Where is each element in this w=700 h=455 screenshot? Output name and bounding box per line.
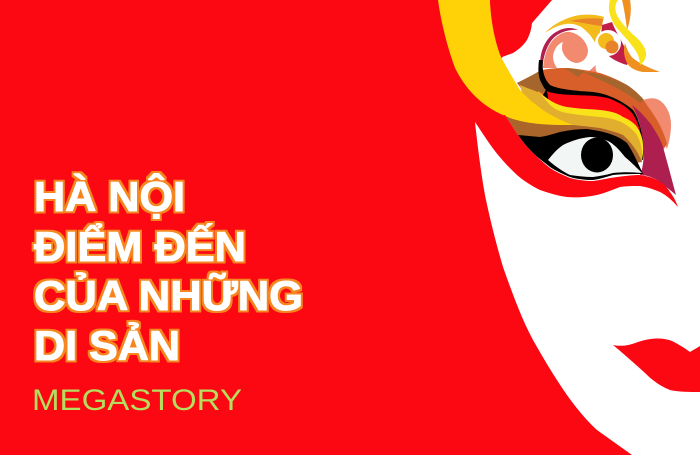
gold eyelid band [520,85,642,162]
red brow stroke [547,91,642,160]
dark brown brow edges [517,68,644,103]
brown lower lid [505,115,642,165]
black brow stroke [538,60,643,160]
salmon peak [585,65,598,74]
eye [518,129,643,180]
yellow eyelid stripe [538,91,643,160]
orange tail feather [622,0,660,72]
orange feather layer [570,18,603,26]
purple eye wing [632,105,676,195]
lips [613,338,700,392]
orange brown brow [517,68,667,150]
title line 2: ĐIỂM ĐẾN [34,222,246,270]
salmon circle behind eye [641,98,671,149]
white swirl circle [595,30,621,56]
black eye outline [518,129,643,180]
title line 1: HÀ NỘI [34,172,185,220]
gold feather [545,15,604,48]
salmon swirl [543,32,588,68]
crimson swirl line [540,28,578,68]
red hair blob [490,0,552,57]
red cheek band [475,115,678,207]
title [34,172,303,369]
title line 4: DI SẢN [34,321,180,369]
crimson feather [600,22,630,65]
eye white [548,137,642,177]
white opera mask face [475,0,700,455]
pupil [581,138,613,172]
gold swirl circle [598,33,614,49]
yellow headband [438,0,573,125]
yellow ribbon [609,0,646,65]
orange swirl circle [606,40,618,54]
mask ornament [540,0,660,72]
megastory label: MEGASTORY [32,384,242,417]
title line 3: CỦA NHỮNG [34,271,303,319]
